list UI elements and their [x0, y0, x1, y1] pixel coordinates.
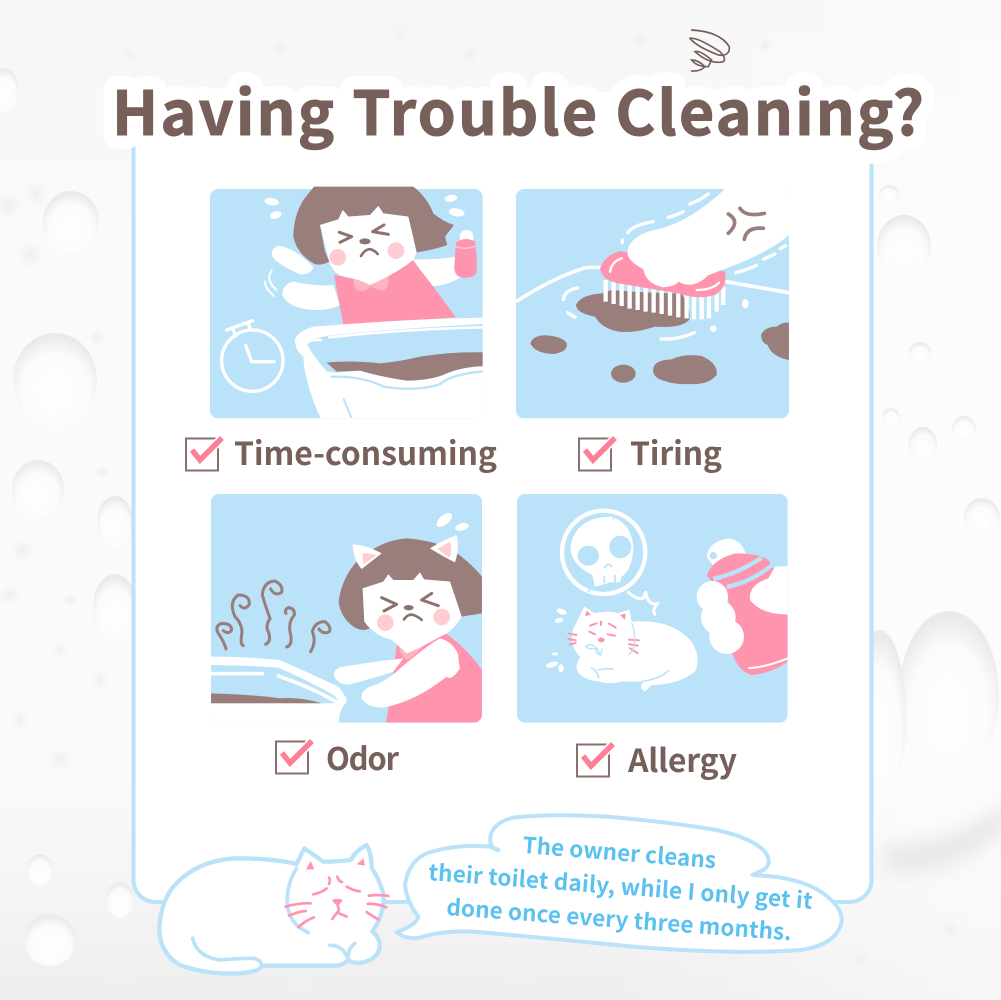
zigzag [628, 592, 658, 614]
label: allergy [577, 736, 737, 782]
hair [293, 187, 454, 265]
dress [386, 634, 482, 723]
speech bubble: their toilet daily, while I only get it [427, 855, 814, 916]
speech bubble: done once every three months. [445, 890, 793, 947]
floor lines [516, 267, 789, 302]
brush handle [600, 251, 726, 297]
label: tiring [579, 429, 722, 475]
sweat drops [436, 513, 452, 527]
skull icon [562, 511, 645, 594]
spray can [707, 538, 746, 568]
anger mark [728, 208, 764, 239]
panel: odor illustration [210, 494, 482, 723]
main white card [134, 120, 872, 902]
label: odor [276, 734, 399, 779]
label: odor: Odor [326, 734, 399, 779]
face [320, 206, 417, 285]
panel: allergy illustration [517, 494, 788, 723]
speech bubble: The owner cleans [521, 828, 717, 875]
label: tiring: Tiring [630, 429, 722, 475]
collar [398, 646, 422, 660]
tub [295, 318, 483, 418]
cat mascot [159, 845, 388, 974]
face [363, 572, 462, 653]
label: allergy: Allergy [627, 736, 737, 782]
sneeze drops [556, 608, 567, 615]
arms [272, 246, 462, 310]
grime stains [530, 290, 789, 384]
tub [211, 657, 347, 723]
collar bow [353, 275, 389, 291]
title: Having Trouble Cleaning? [112, 64, 924, 153]
label: time-consuming: Time-consuming [234, 429, 497, 475]
panel: time-consuming illustration [210, 187, 483, 418]
title: Having Trouble Cleaning? [112, 64, 924, 153]
motion lines [563, 194, 786, 339]
speech bubble [397, 815, 842, 952]
hand on can [697, 566, 788, 654]
bottle [460, 230, 473, 240]
stopwatch [222, 321, 283, 391]
arms [334, 658, 403, 684]
brush bristles [606, 280, 723, 319]
panel: tiring illustration [516, 189, 789, 418]
sick cat [568, 607, 698, 692]
icon: scribble swirl [690, 30, 729, 71]
hair [339, 538, 482, 630]
sweat drops [264, 198, 278, 206]
cat ears [353, 535, 458, 569]
odor swirls [217, 581, 330, 652]
paw and arm [627, 189, 789, 287]
dress [334, 260, 456, 325]
